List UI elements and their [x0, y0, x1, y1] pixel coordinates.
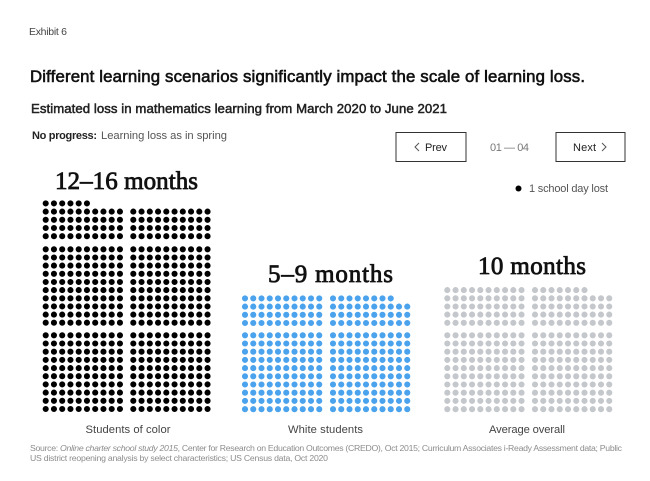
- category label: Average overall: [489, 424, 565, 436]
- title: Different learning scenarios significantly impact the scale of learning loss.: [30, 67, 585, 86]
- subtitle: Estimated loss in mathematics learning from March 2020 to June 2021: [31, 101, 447, 116]
- next button: Next: [573, 142, 596, 154]
- next button: [556, 132, 625, 162]
- exhibit label: Exhibit 6: [29, 26, 67, 38]
- legend: 1 school day lost: 1 school day lost: [529, 183, 608, 195]
- heading: 10 months: 10 months: [478, 253, 586, 280]
- dot grid: black: [46, 203, 208, 409]
- category label: White students: [288, 424, 363, 436]
- source note: [30, 443, 623, 463]
- page indicator: 01 — 04: [490, 142, 529, 154]
- heading: 5–9 months: 5–9 months: [268, 261, 393, 288]
- panel: white students: [245, 261, 408, 436]
- scenario description: No progress:: [32, 130, 97, 142]
- panel: students of color: [46, 168, 208, 436]
- heading: 12–16 months: 12–16 months: [55, 168, 198, 195]
- source note: Source: Online charter school study 2015, Center for Research on Education Outcomes (CREDO), Oct 2015; Curriculum Associates i-Ready Assessment data; Public: [30, 443, 623, 453]
- scenario description: Learning loss as in spring: [101, 130, 227, 142]
- dot grid: gray: [447, 290, 610, 409]
- previous button: [396, 132, 466, 162]
- dot grid: blue: [245, 298, 408, 409]
- category label: Students of color: [86, 424, 171, 436]
- previous button: Prev: [425, 142, 448, 154]
- panel: average overall: [447, 253, 610, 436]
- source note: US district reopening analysis by select characteristics; US Census data, Oct 2020: [30, 453, 328, 463]
- scenario description: [32, 130, 227, 142]
